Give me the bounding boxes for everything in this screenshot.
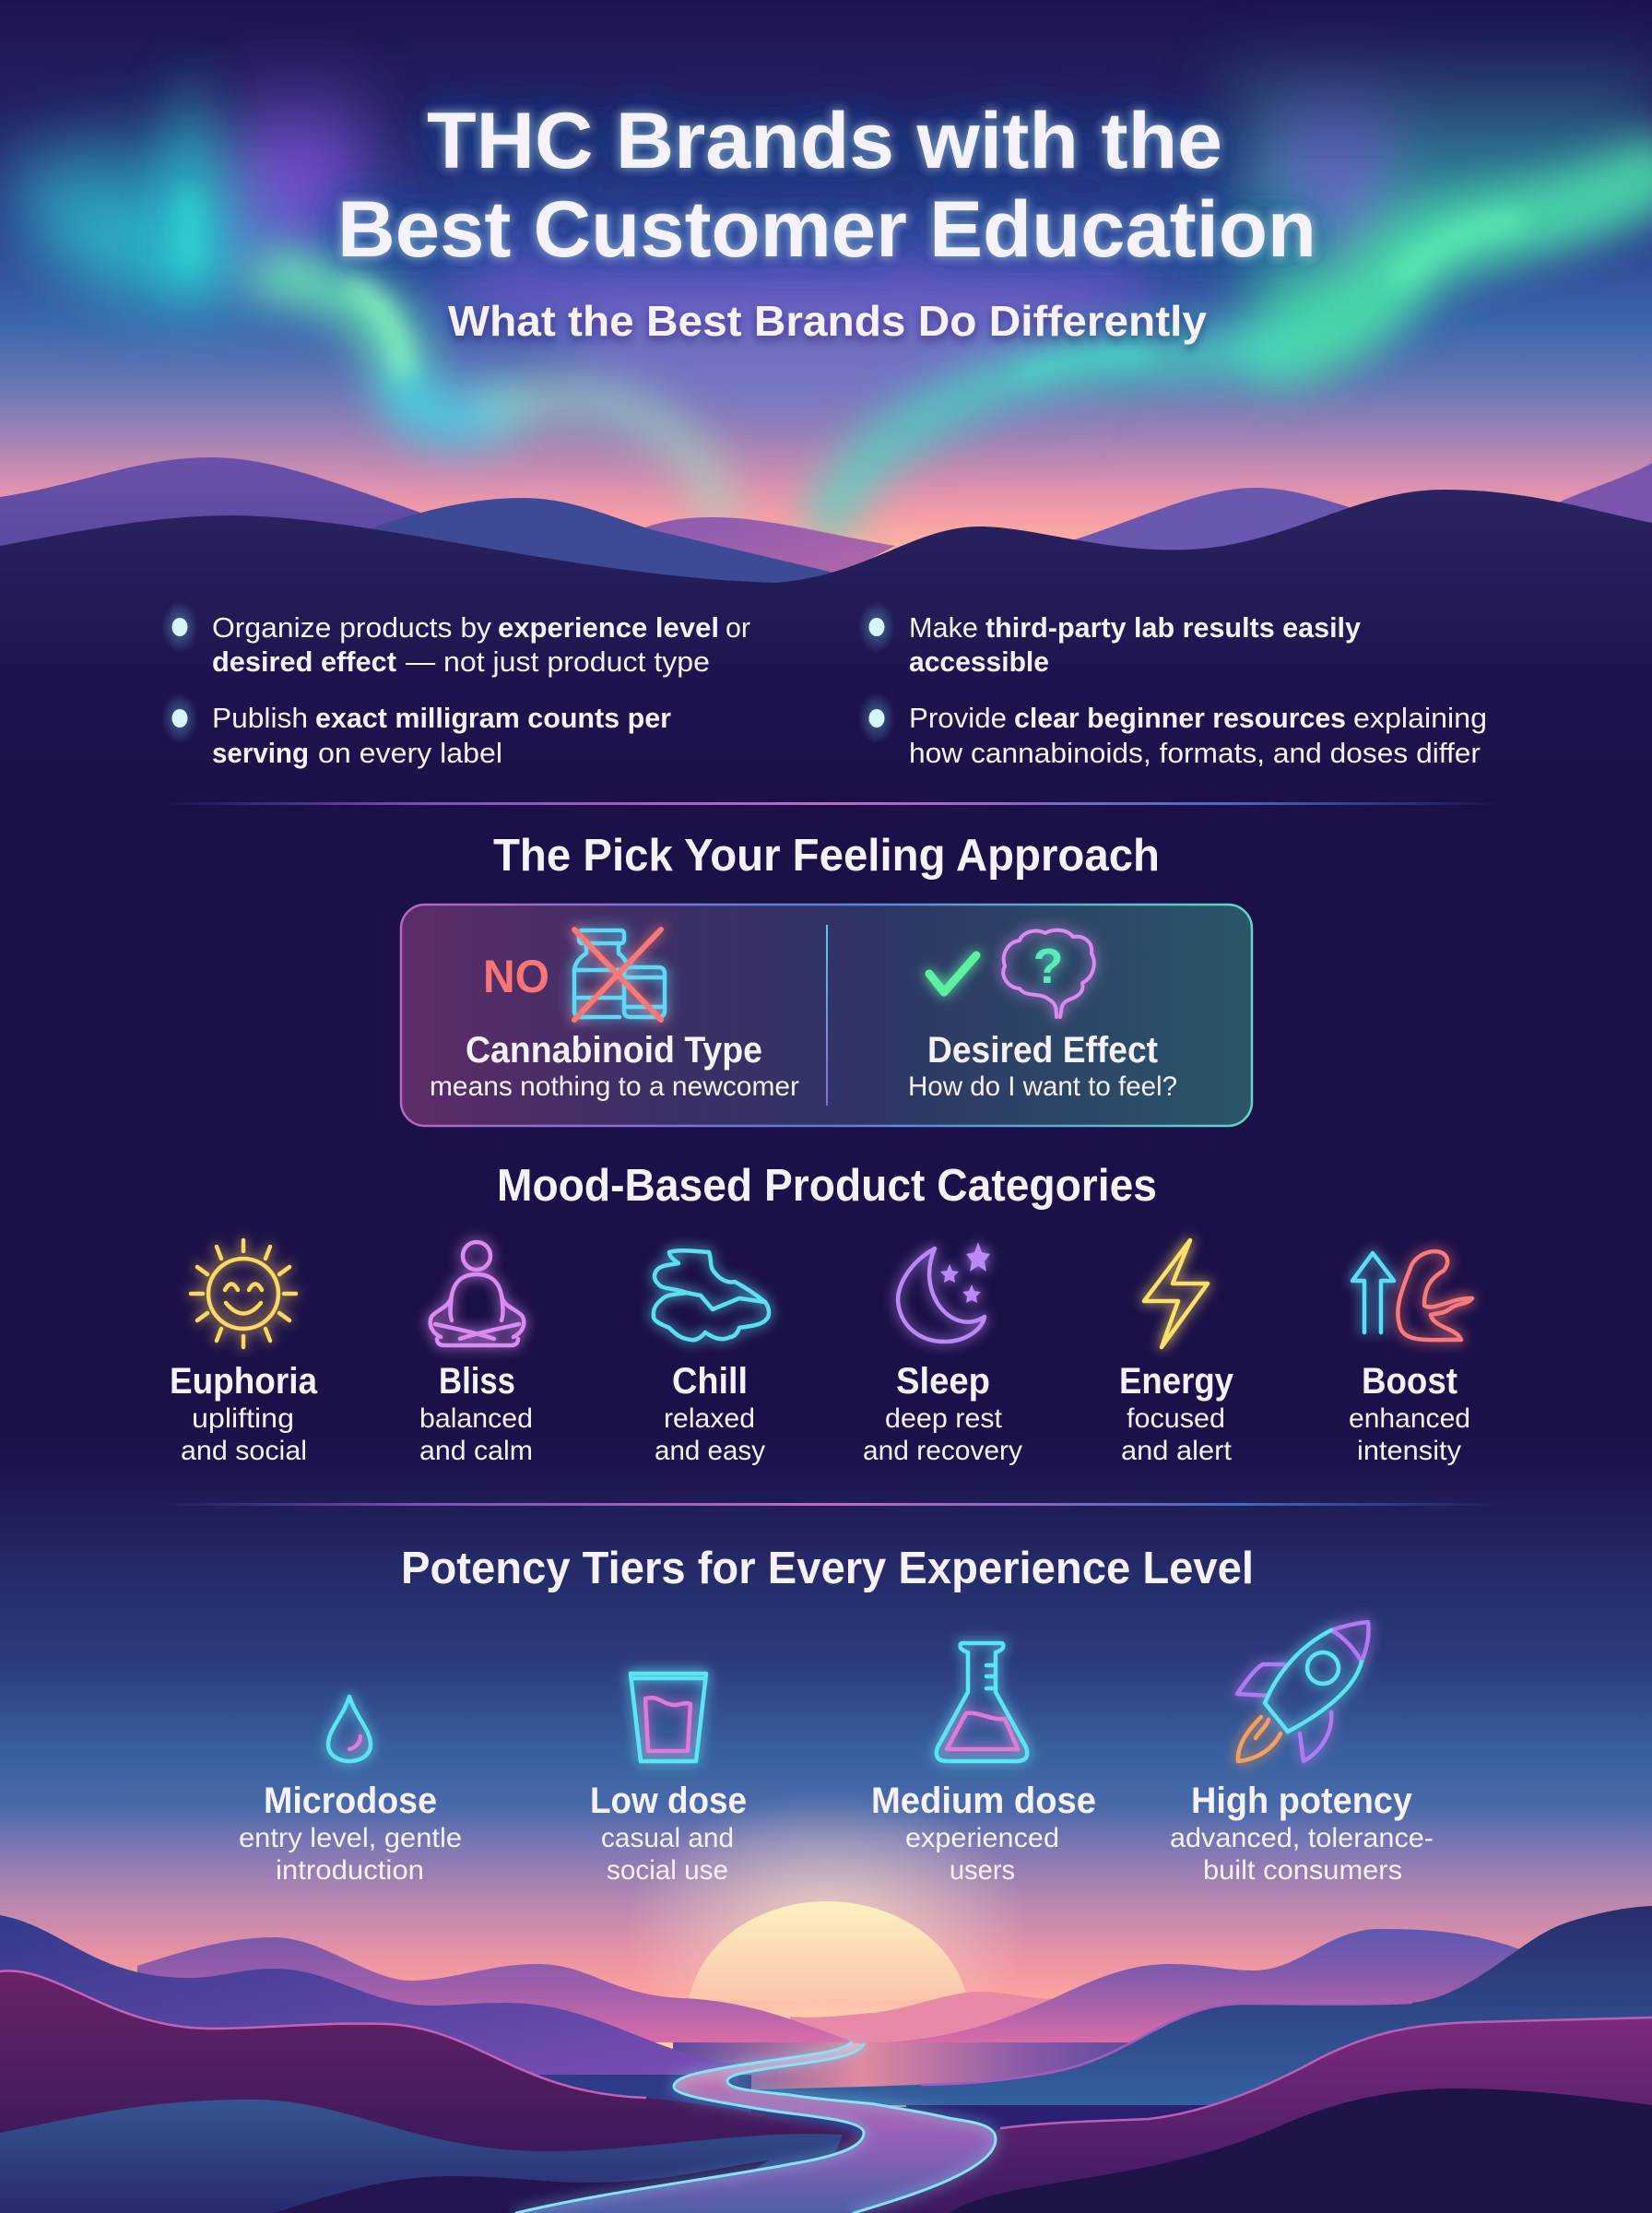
sun glow xyxy=(624,1789,1030,2065)
tier: microdose: Microdose xyxy=(264,1781,437,1821)
mood: boost: enhanced xyxy=(1349,1403,1470,1434)
mood: bliss: and calm xyxy=(419,1436,533,1466)
bullet: organize products: experience level xyxy=(498,611,719,644)
winding road xyxy=(516,2042,996,2213)
icon: droplet xyxy=(328,1697,371,1761)
mood: energy: focused xyxy=(1127,1403,1225,1434)
bullet: publish milligram counts: serving xyxy=(212,737,309,769)
icon: crossed out bottles xyxy=(574,929,665,1020)
mood: energy xyxy=(1119,1240,1234,1466)
bullet: publish milligram counts xyxy=(161,692,671,769)
bullet: organize products: — not just product type xyxy=(406,645,710,678)
mood: boost: intensity xyxy=(1357,1436,1461,1466)
icon: flask xyxy=(937,1643,1027,1761)
icon: lightning bolt xyxy=(1144,1240,1208,1347)
bullet list xyxy=(161,601,1487,769)
title: Best Customer Education xyxy=(337,185,1316,274)
tier: high potency: High potency xyxy=(1191,1781,1413,1821)
heading: potency tiers: Potency Tiers for Every Experience Level xyxy=(401,1544,1254,1593)
heading: pick your feeling: The Pick Your Feeling Approach xyxy=(493,831,1160,881)
tier: medium dose xyxy=(871,1643,1096,1886)
bullet: organize products xyxy=(161,601,750,678)
mood: energy: Energy xyxy=(1119,1361,1234,1402)
subtitle: What the Best Brands Do Differently xyxy=(448,297,1207,345)
left caption: means nothing to a newcomer xyxy=(430,1071,799,1102)
icon: brain with question mark: ? xyxy=(1032,939,1064,994)
icon: moon and stars xyxy=(898,1242,990,1342)
icon: sun xyxy=(191,1240,296,1347)
mood: chill xyxy=(654,1250,769,1466)
no label: NO xyxy=(483,951,549,1002)
tier: low dose: Low dose xyxy=(590,1781,747,1821)
mood: sleep: Sleep xyxy=(896,1361,990,1402)
panel: pick your feeling comparison xyxy=(401,905,1252,1126)
heading: mood categories: Mood-Based Product Categories xyxy=(497,1161,1157,1211)
bullet: lab results: Make xyxy=(909,611,978,644)
icon: cloud xyxy=(654,1250,769,1340)
mood: boost xyxy=(1349,1251,1472,1466)
left label: Cannabinoid Type xyxy=(466,1030,762,1071)
bullet: beginner resources: how cannabinoids, formats, and doses differ xyxy=(909,737,1481,769)
mood: chill: Chill xyxy=(672,1361,748,1402)
bullet: publish milligram counts: exact milligram counts per xyxy=(315,702,671,734)
bullet: lab results: accessible xyxy=(909,645,1049,678)
tier: low dose xyxy=(590,1674,747,1886)
icon: arrow and flexed arm xyxy=(1352,1251,1472,1340)
bullet: organize products: Organize products by xyxy=(212,611,492,644)
tier: microdose: introduction xyxy=(276,1855,424,1886)
mood: bliss xyxy=(419,1242,533,1466)
mood: euphoria: Euphoria xyxy=(170,1361,318,1402)
tier: high potency xyxy=(1170,1622,1434,1886)
icon: brain with question mark xyxy=(1003,930,1094,1017)
tier: medium dose: Medium dose xyxy=(871,1781,1096,1821)
aurora xyxy=(14,46,1652,516)
mood: boost: Boost xyxy=(1362,1361,1457,1402)
tier: medium dose: experienced xyxy=(905,1823,1059,1853)
bullet: organize products: or xyxy=(726,611,750,644)
bullet: beginner resources: clear beginner resources xyxy=(1014,702,1346,734)
bullet: beginner resources: Provide xyxy=(909,702,1007,734)
icon: meditating figure xyxy=(431,1242,524,1345)
icon: check mark xyxy=(929,955,976,992)
mood: chill: relaxed xyxy=(664,1403,755,1434)
bullet: publish milligram counts: on every label xyxy=(318,737,502,769)
tier: low dose: casual and xyxy=(601,1823,734,1853)
mood: sleep: deep rest xyxy=(885,1403,1003,1434)
right caption: How do I want to feel? xyxy=(908,1071,1177,1102)
mood: bliss: Bliss xyxy=(439,1361,515,1402)
tier: microdose: entry level, gentle xyxy=(239,1823,462,1853)
mood: bliss: balanced xyxy=(419,1403,533,1434)
bullet: publish milligram counts: Publish xyxy=(212,702,308,734)
bullet: organize products: desired effect xyxy=(212,645,396,678)
mood: euphoria: and social xyxy=(181,1436,307,1466)
bullet: lab results xyxy=(858,601,1362,678)
icon: rocket xyxy=(1237,1622,1369,1761)
mood: euphoria xyxy=(170,1240,318,1466)
title xyxy=(337,97,1316,274)
mood: sleep: and recovery xyxy=(863,1436,1022,1466)
mood: chill: and easy xyxy=(655,1436,765,1466)
icon: glass xyxy=(631,1674,706,1761)
tier: high potency: advanced, tolerance- xyxy=(1170,1823,1434,1853)
mood: energy: and alert xyxy=(1121,1436,1233,1466)
tier: high potency: built consumers xyxy=(1203,1855,1402,1886)
bullet: beginner resources xyxy=(858,692,1487,769)
right label: Desired Effect xyxy=(927,1030,1158,1071)
tier: medium dose: users xyxy=(950,1855,1015,1886)
upper mountain range xyxy=(0,457,1652,664)
mood: sleep xyxy=(863,1242,1022,1466)
mood: euphoria: uplifting xyxy=(192,1403,294,1434)
lower landscape xyxy=(0,1789,1652,2213)
tier: microdose xyxy=(239,1697,462,1886)
bullet: beginner resources: explaining xyxy=(1353,702,1487,734)
sun xyxy=(689,1901,968,2001)
bullet: lab results: third-party lab results easily xyxy=(985,611,1362,644)
title: THC Brands with the xyxy=(427,97,1222,185)
tier: low dose: social use xyxy=(607,1855,728,1886)
